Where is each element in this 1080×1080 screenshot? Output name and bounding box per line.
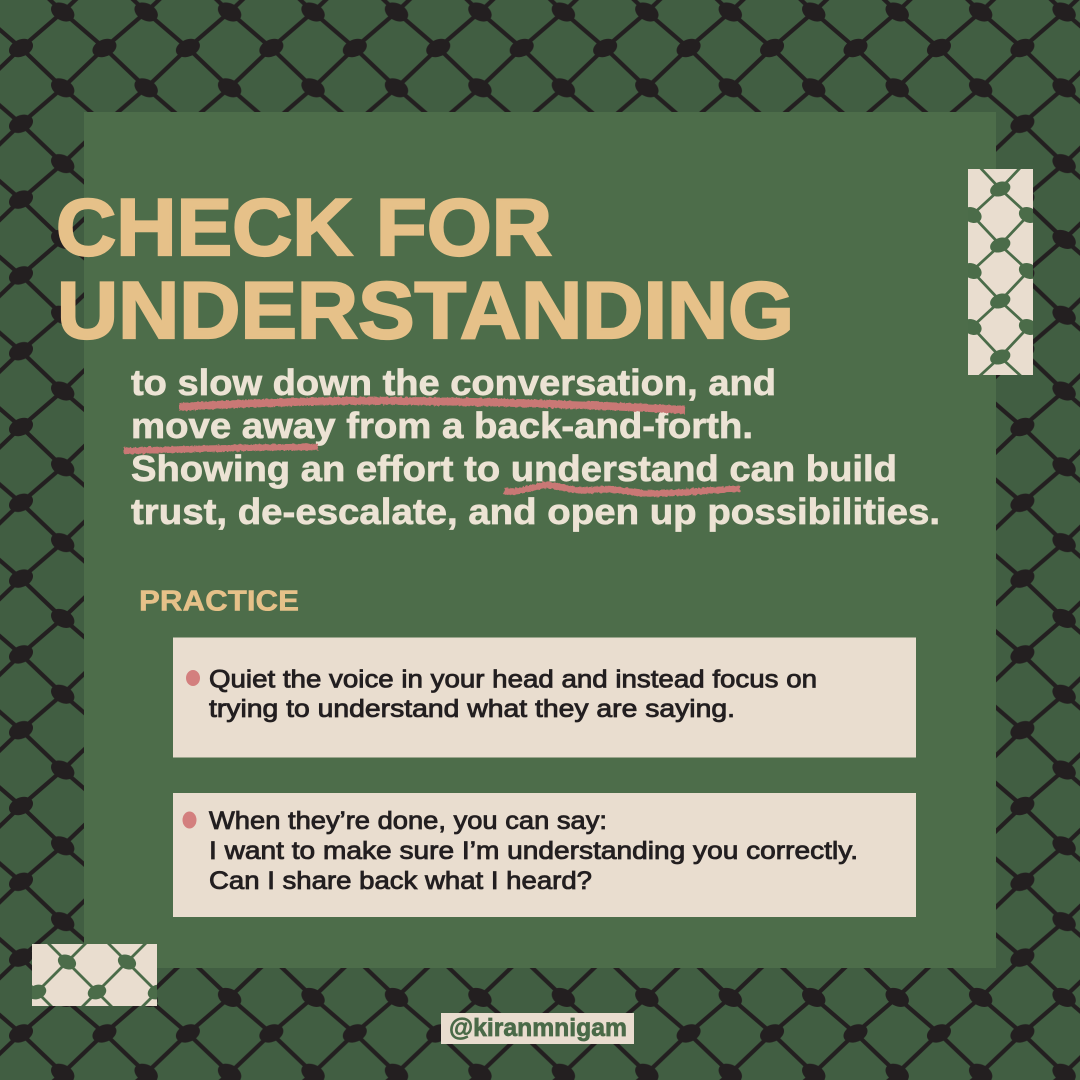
bullet 1: [186, 670, 200, 686]
intro paragraph: move away from a back-and-forth.: [131, 405, 753, 446]
practice heading: PRACTICE: [139, 586, 299, 618]
card 2 text: Can I share back what I heard?: [209, 867, 592, 895]
author handle: @kiranmnigam: [449, 1014, 627, 1042]
practice card 1: [173, 638, 916, 758]
title: CHECK FOR: [56, 183, 552, 273]
intro paragraph: to slow down the conversation, and: [131, 362, 776, 403]
hand-drawn underlines: [124, 401, 740, 493]
practice card 2: [173, 793, 916, 917]
central green panel: [84, 112, 996, 968]
card 1 text: trying to understand what they are saying.: [209, 695, 735, 723]
card 1 text: Quiet the voice in your head and instead focus on: [209, 666, 817, 694]
title: [56, 183, 794, 356]
intro paragraph: [131, 362, 940, 532]
decorative net swatch: right: [968, 169, 1033, 375]
card 2 text: I want to make sure I’m understanding you correctly.: [209, 837, 858, 865]
intro paragraph: trust, de-escalate, and open up possibilities.: [131, 491, 940, 532]
decorative net swatch: bottom left: [32, 944, 157, 1006]
bullet 2: [182, 812, 196, 828]
card 1 text: [209, 666, 817, 723]
intro paragraph: Showing an effort to understand can build: [131, 448, 897, 489]
card 2 text: When they’re done, you can say:: [209, 807, 607, 835]
card 2 text: [209, 807, 858, 895]
title: UNDERSTANDING: [57, 266, 794, 356]
